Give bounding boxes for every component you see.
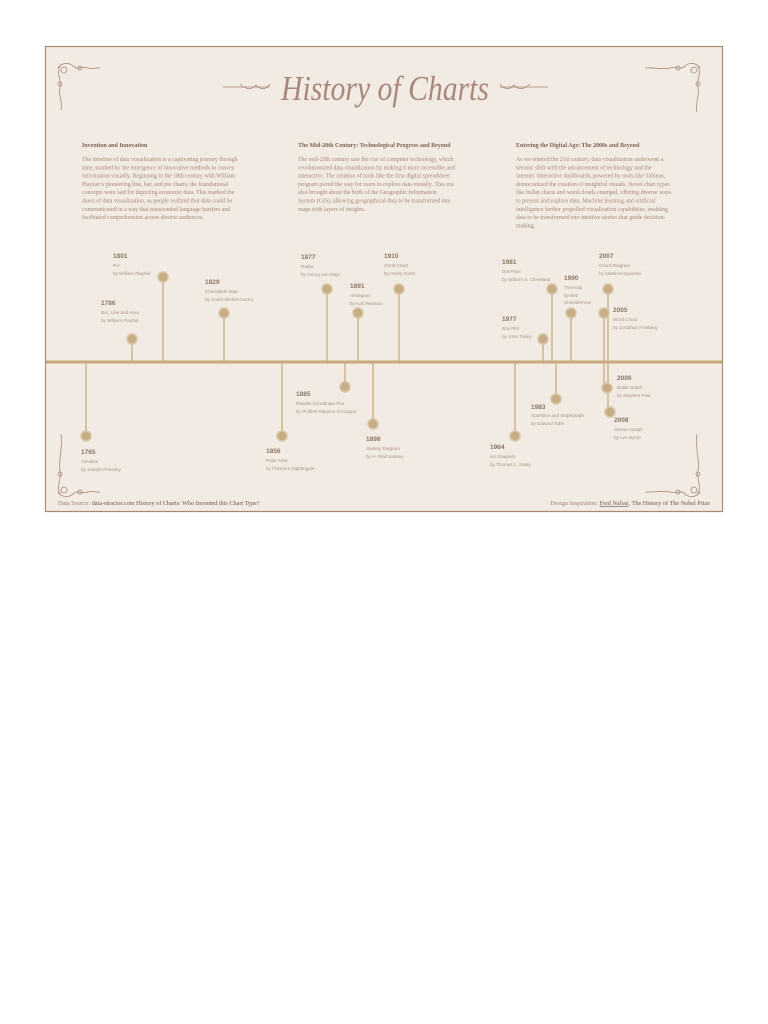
- text block: Mid-20th Century: [298, 143, 457, 213]
- timeline labels: Pie: [113, 263, 120, 268]
- timeline labels: by Stephen Few: [617, 393, 651, 398]
- timeline labels: Timeline: [81, 459, 99, 464]
- text block: Invention and Innovation: communicated in a way that transcended language barriers and: [82, 207, 230, 213]
- timeline labels: Chord Diagram: [599, 263, 630, 268]
- text block: Digital Age: making.: [516, 223, 536, 229]
- timeline labels: Treemap: [564, 285, 583, 290]
- timeline labels: Word Cloud: [613, 317, 638, 322]
- text block: Mid-20th Century: The Mid-20th Century: Technological Progress and Beyond: [298, 143, 451, 149]
- timeline labels: 1891: [350, 283, 365, 290]
- timeline labels: Gantt Chart: [384, 263, 408, 268]
- text block: Invention and Innovation: concepts were laid for depicting economic data. This marked the: [82, 189, 235, 196]
- timeline labels: 1981: [502, 259, 517, 266]
- text block: Invention and Innovation: dawn of data visualization, as people realized that data could be: [82, 198, 233, 204]
- footer: design inspiration: Design Inspiration: Fred Naliaz, The History of The Nobel Prize: [550, 500, 710, 507]
- icon: corner ornament bottom-right: [645, 434, 700, 497]
- timeline labels: 1877: [301, 254, 316, 261]
- text block: Invention and Innovation: [82, 143, 239, 221]
- text block: Invention and Innovation: Invention and Innovation: [82, 143, 148, 149]
- timeline labels: by Edward Tufte: [531, 421, 565, 426]
- icon: corner ornament bottom-left: [58, 434, 100, 497]
- timeline labels: by Martin Krzywinski: [599, 271, 641, 276]
- text block: Mid-20th Century: The mid-20th century saw the rise of computer technology, which: [298, 156, 453, 163]
- text block: Digital Age: Entering the Digital Age: The 2000s and Beyond: [516, 143, 640, 149]
- timeline labels: Box Plot: [502, 326, 520, 331]
- timeline labels: 1990: [564, 275, 579, 282]
- icon: corner ornament top-right: [645, 63, 700, 112]
- icon: corner ornament top-left: [58, 63, 100, 110]
- text block: Mid-20th Century: maps with layers of insights.: [298, 206, 366, 213]
- timeline labels: by Georg von Mayr: [301, 272, 341, 277]
- text block: Mid-20th Century: also brought about the birth of the Geographic Information: [298, 189, 437, 196]
- timeline labels: Sparkline and Slopegraph: [531, 413, 584, 418]
- timeline labels: 1983: [531, 404, 546, 411]
- timeline labels: 1801: [113, 253, 128, 260]
- timeline labels: 1765: [81, 449, 96, 456]
- timeline labels: Arc Diagram: [490, 454, 516, 459]
- text block: Digital Age: [516, 143, 673, 229]
- timeline labels: Shneiderman: [564, 300, 592, 305]
- timeline labels: Bullet Graph: [617, 385, 643, 390]
- timeline labels: Choropleth Map: [205, 289, 238, 294]
- timeline labels: 1964: [490, 444, 505, 451]
- timeline labels: by Karl Pearson: [350, 301, 383, 306]
- text block: Digital Age: As we entered the 21st century, data visualization underwent a: [516, 157, 664, 163]
- chart: timeline: [46, 272, 722, 441]
- timeline labels: by William S. Cleveland: [502, 277, 551, 282]
- timeline labels: 1786: [101, 300, 116, 307]
- timeline labels: by Lee Byron: [614, 435, 642, 440]
- text block: Digital Age: internet. Interactive dashboards, powered by tools like Tableau,: [516, 174, 666, 180]
- timeline labels: Radar: [301, 264, 314, 269]
- text block: Digital Age: like bullet charts and word clouds emerged, offering diverse ways: [516, 189, 672, 196]
- text block: Invention and Innovation: information visually. Beginning in the 18th century with William: [82, 173, 236, 180]
- timeline labels: by Florence Nightingale: [266, 466, 315, 471]
- timeline labels: Histogram: [350, 293, 371, 298]
- footer: data source: Data Source: data-stractor.com History of Charts: Who Invented this Chart Type?: [58, 500, 260, 507]
- timeline labels: by Ben: [564, 293, 579, 298]
- timeline labels: Stream Graph: [614, 427, 643, 432]
- timeline labels: 1910: [384, 253, 399, 260]
- text block: Digital Age: intelligence further propelled visualization capabilities, enabling: [516, 206, 668, 213]
- text block: Digital Age: seismic shift with the advancement of technology and the: [516, 164, 652, 171]
- timeline labels: 1829: [205, 279, 220, 286]
- timeline labels: by Joseph Priestley: [81, 467, 122, 472]
- timeline labels: 2007: [599, 253, 614, 260]
- text block: Mid-20th Century: System (GIS), allowing geographical data to be transformed into: [298, 198, 451, 204]
- timeline labels: 1898: [366, 436, 381, 443]
- timeline labels: Bar, Line and Area: [101, 310, 139, 315]
- text block: Invention and Innovation: facilitated comprehension across diverse audiences.: [82, 214, 204, 221]
- timeline labels: Sankey Diagram: [366, 446, 400, 451]
- text block: Digital Age: to present and explore data. Machine learning and artificial: [516, 198, 656, 204]
- text block: Digital Age: data to be transformed into intuitive stories that guide decision-: [516, 214, 665, 221]
- timeline labels: by Thomas L. Saaty: [490, 462, 531, 467]
- timeline labels: by André-Michel Guerry: [205, 297, 254, 302]
- timeline labels: by H. Riall Sankey: [366, 454, 404, 459]
- timeline labels: 1977: [502, 316, 517, 323]
- timeline labels: 1856: [266, 448, 281, 455]
- timeline labels: by William Playfair: [113, 271, 151, 276]
- text block: Invention and Innovation: The timeline of data visualization is a captivating journey through: [82, 156, 238, 163]
- timeline labels: [81, 253, 658, 472]
- timeline labels: by Philbert Maurice d'Ocagne: [296, 409, 357, 414]
- text block: Mid-20th Century: revolutionized data visualization by making it more accessible and: [298, 165, 455, 171]
- text block: Digital Age: democratized the creation of insightful visuals. Novel chart types: [516, 181, 670, 188]
- timeline labels: Dot Plots: [502, 269, 521, 274]
- timeline labels: by Jonathan Feinberg: [613, 325, 658, 330]
- timeline labels: 1885: [296, 391, 311, 398]
- timeline labels: Parallel Coordinate Plot: [296, 401, 345, 406]
- text block: Mid-20th Century: interactive. The creation of tools like the first digital spreadsheet: [298, 173, 450, 180]
- timeline labels: by John Tukey: [502, 334, 532, 339]
- timeline labels: 2008: [614, 417, 629, 424]
- text block: Invention and Innovation: time, marked by the emergence of innovative methods to convey: [82, 164, 235, 171]
- timeline labels: 2005: [613, 307, 628, 314]
- timeline labels: by Henry Gantt: [384, 271, 416, 276]
- text block: Invention and Innovation: Playfair's pioneering line, bar, and pie charts, the foundational: [82, 181, 229, 188]
- timeline labels: 2006: [617, 375, 632, 382]
- timeline labels: by William Playfair: [101, 318, 139, 323]
- title: History of Charts: [280, 69, 489, 108]
- panel: infographic frame: [46, 46, 722, 512]
- text block: Mid-20th Century: program paved the way for users to explore data visually. This era: [298, 181, 454, 188]
- timeline labels: Polar Area: [266, 458, 288, 463]
